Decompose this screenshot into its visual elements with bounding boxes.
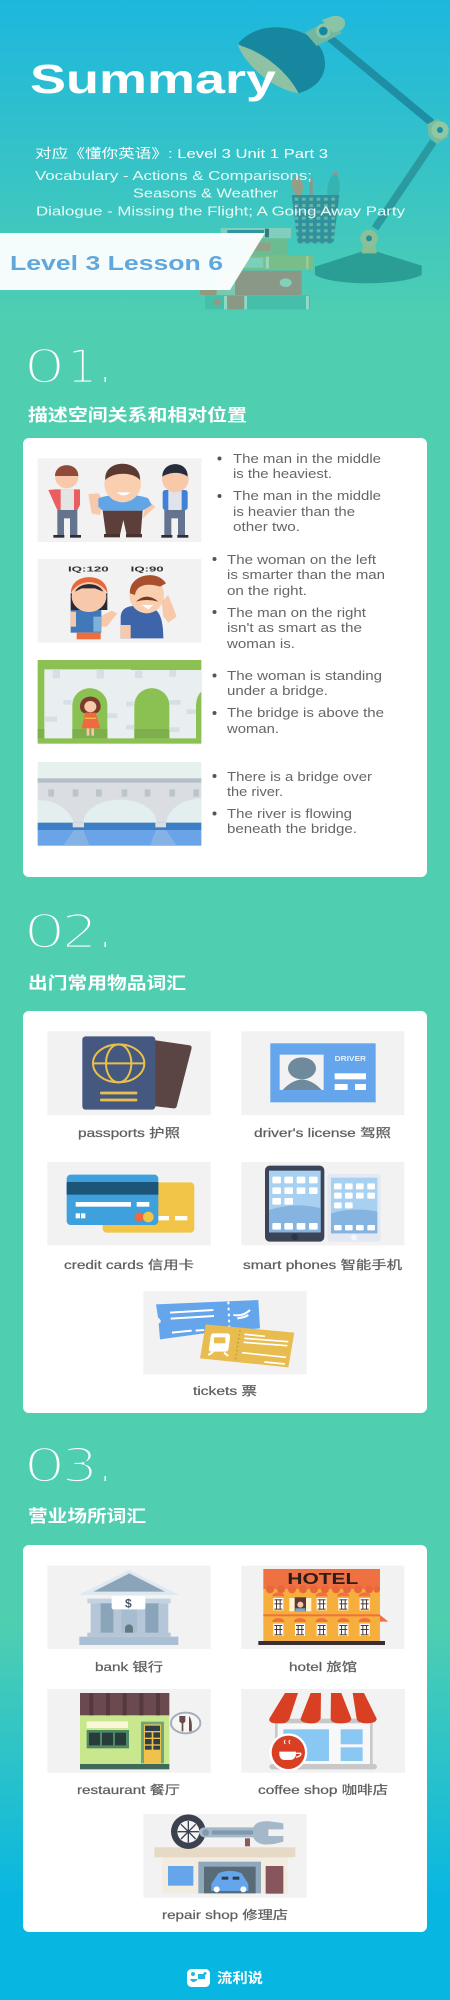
panel: travel items bbox=[23, 1011, 427, 1413]
section number 02 bbox=[23, 905, 106, 960]
illustration: woman under a bridge bbox=[38, 660, 201, 744]
icon: bank: $ bbox=[125, 1596, 132, 1610]
text block: smarter: on the right. bbox=[227, 584, 307, 598]
text block: course info: Vocabulary - Actions & Comparisons; bbox=[35, 168, 312, 183]
illustration: bridge over river bbox=[38, 762, 201, 846]
label: hotel: hotel 旅馆 bbox=[289, 1659, 357, 1674]
icon: hotel: HOTEL bbox=[287, 1571, 358, 1588]
label: passports: passports 护照 bbox=[78, 1126, 180, 1140]
section number 01: 0 bbox=[23, 340, 66, 395]
heading: section 2: 出门常用物品词汇 bbox=[28, 974, 186, 993]
icon: smart phones bbox=[241, 1162, 404, 1245]
text block: course info: Seasons & Weather bbox=[133, 186, 279, 200]
text block: course info bbox=[35, 146, 406, 218]
text block: under a bridge: The bridge is above the bbox=[227, 706, 384, 720]
text block: under a bridge: The woman is standing bbox=[227, 669, 382, 683]
label: driver's license: driver's license 驾照 bbox=[254, 1126, 391, 1140]
illustration: three men bbox=[38, 458, 201, 542]
text block: over the river: beneath the bridge. bbox=[227, 822, 357, 836]
icon: coffee shop bbox=[241, 1689, 405, 1773]
section number 01 bbox=[23, 340, 106, 395]
text block: smarter bbox=[212, 553, 385, 651]
text block: over the river: the river. bbox=[227, 785, 283, 799]
banner: level and lesson bbox=[0, 233, 265, 290]
label: smart phones: smart phones 智能手机 bbox=[243, 1257, 402, 1272]
icon: pencil cup bbox=[292, 172, 340, 243]
section number 03 bbox=[23, 1439, 106, 1494]
text block: under a bridge bbox=[212, 669, 384, 736]
icon: restaurant bbox=[47, 1689, 211, 1773]
banner: level and lesson: Level 3 Lesson 6 bbox=[10, 253, 223, 275]
label: tickets: tickets 票 bbox=[193, 1384, 257, 1398]
footer logo: 流利说 bbox=[217, 1970, 263, 1986]
text block: smarter: The woman on the left bbox=[227, 553, 377, 567]
text block: heaviest: other two. bbox=[233, 520, 300, 534]
heading: section 1: 描述空间关系和相对位置 bbox=[28, 405, 247, 425]
text block: course info: 对应《懂你英语》: Level 3 Unit 1 Part 3 bbox=[35, 146, 328, 161]
section number 03: 3 bbox=[61, 1439, 98, 1494]
label: bank: bank 银行 bbox=[95, 1660, 163, 1674]
icon: lamp bbox=[238, 16, 449, 283]
label: repair shop: repair shop 修理店 bbox=[162, 1907, 288, 1922]
section number 02: 2 bbox=[61, 905, 98, 960]
icon: driver's license: DRIVER bbox=[335, 1056, 366, 1063]
heading: section 3: 营业场所词汇 bbox=[28, 1507, 146, 1526]
illustration: desk lamp, books and pencil cup bbox=[200, 16, 449, 309]
text block: smarter: is smarter than the man bbox=[227, 568, 385, 582]
text block: smarter: isn't as smart as the bbox=[227, 621, 362, 635]
label: credit cards: credit cards 信用卡 bbox=[64, 1258, 194, 1272]
icon: driver's license bbox=[241, 1031, 404, 1115]
text block: heaviest: is the heaviest. bbox=[233, 467, 332, 481]
icon: passports bbox=[47, 1031, 211, 1115]
text block: smarter: woman is. bbox=[226, 637, 295, 651]
illustration: woman and man with IQ scores bbox=[38, 559, 201, 643]
icon: repair shop bbox=[143, 1814, 307, 1898]
text block: over the river bbox=[212, 770, 372, 836]
section number 01: 1 bbox=[67, 340, 97, 395]
icon: hotel bbox=[241, 1566, 404, 1649]
text block: course info: Dialogue - Missing the Flight; A Going Away Party bbox=[36, 204, 406, 218]
text block: heaviest: The man in the middle bbox=[233, 489, 381, 503]
text block: smarter: The man on the right bbox=[227, 606, 367, 620]
label: restaurant: restaurant 餐厅 bbox=[77, 1782, 180, 1797]
panel: spatial relations bbox=[23, 438, 427, 877]
icon: credit cards bbox=[47, 1162, 211, 1245]
illustration: woman and man with IQ scores: IQ:90 bbox=[131, 564, 164, 573]
illustration: woman and man with IQ scores: IQ:120 bbox=[68, 564, 109, 573]
label: coffee shop: coffee shop 咖啡店 bbox=[258, 1782, 388, 1797]
icon: tickets bbox=[143, 1291, 307, 1374]
text block: heaviest: is heavier than the bbox=[233, 505, 355, 519]
icon: logo bbox=[187, 1969, 210, 1987]
text block: heaviest bbox=[218, 452, 381, 534]
title: Summary bbox=[30, 56, 276, 102]
text block: heaviest: The man in the middle bbox=[233, 452, 381, 466]
section number 03: 0 bbox=[23, 1439, 66, 1494]
text block: over the river: There is a bridge over bbox=[227, 770, 372, 784]
panel: business places bbox=[23, 1545, 427, 1932]
icon: stack of books bbox=[200, 228, 313, 309]
icon: bank bbox=[47, 1566, 211, 1649]
text block: under a bridge: under a bridge. bbox=[227, 684, 328, 698]
section number 02: 0 bbox=[23, 905, 66, 960]
text block: under a bridge: woman. bbox=[226, 722, 279, 736]
text block: over the river: The river is flowing bbox=[227, 807, 352, 821]
footer logo bbox=[187, 1969, 263, 1987]
